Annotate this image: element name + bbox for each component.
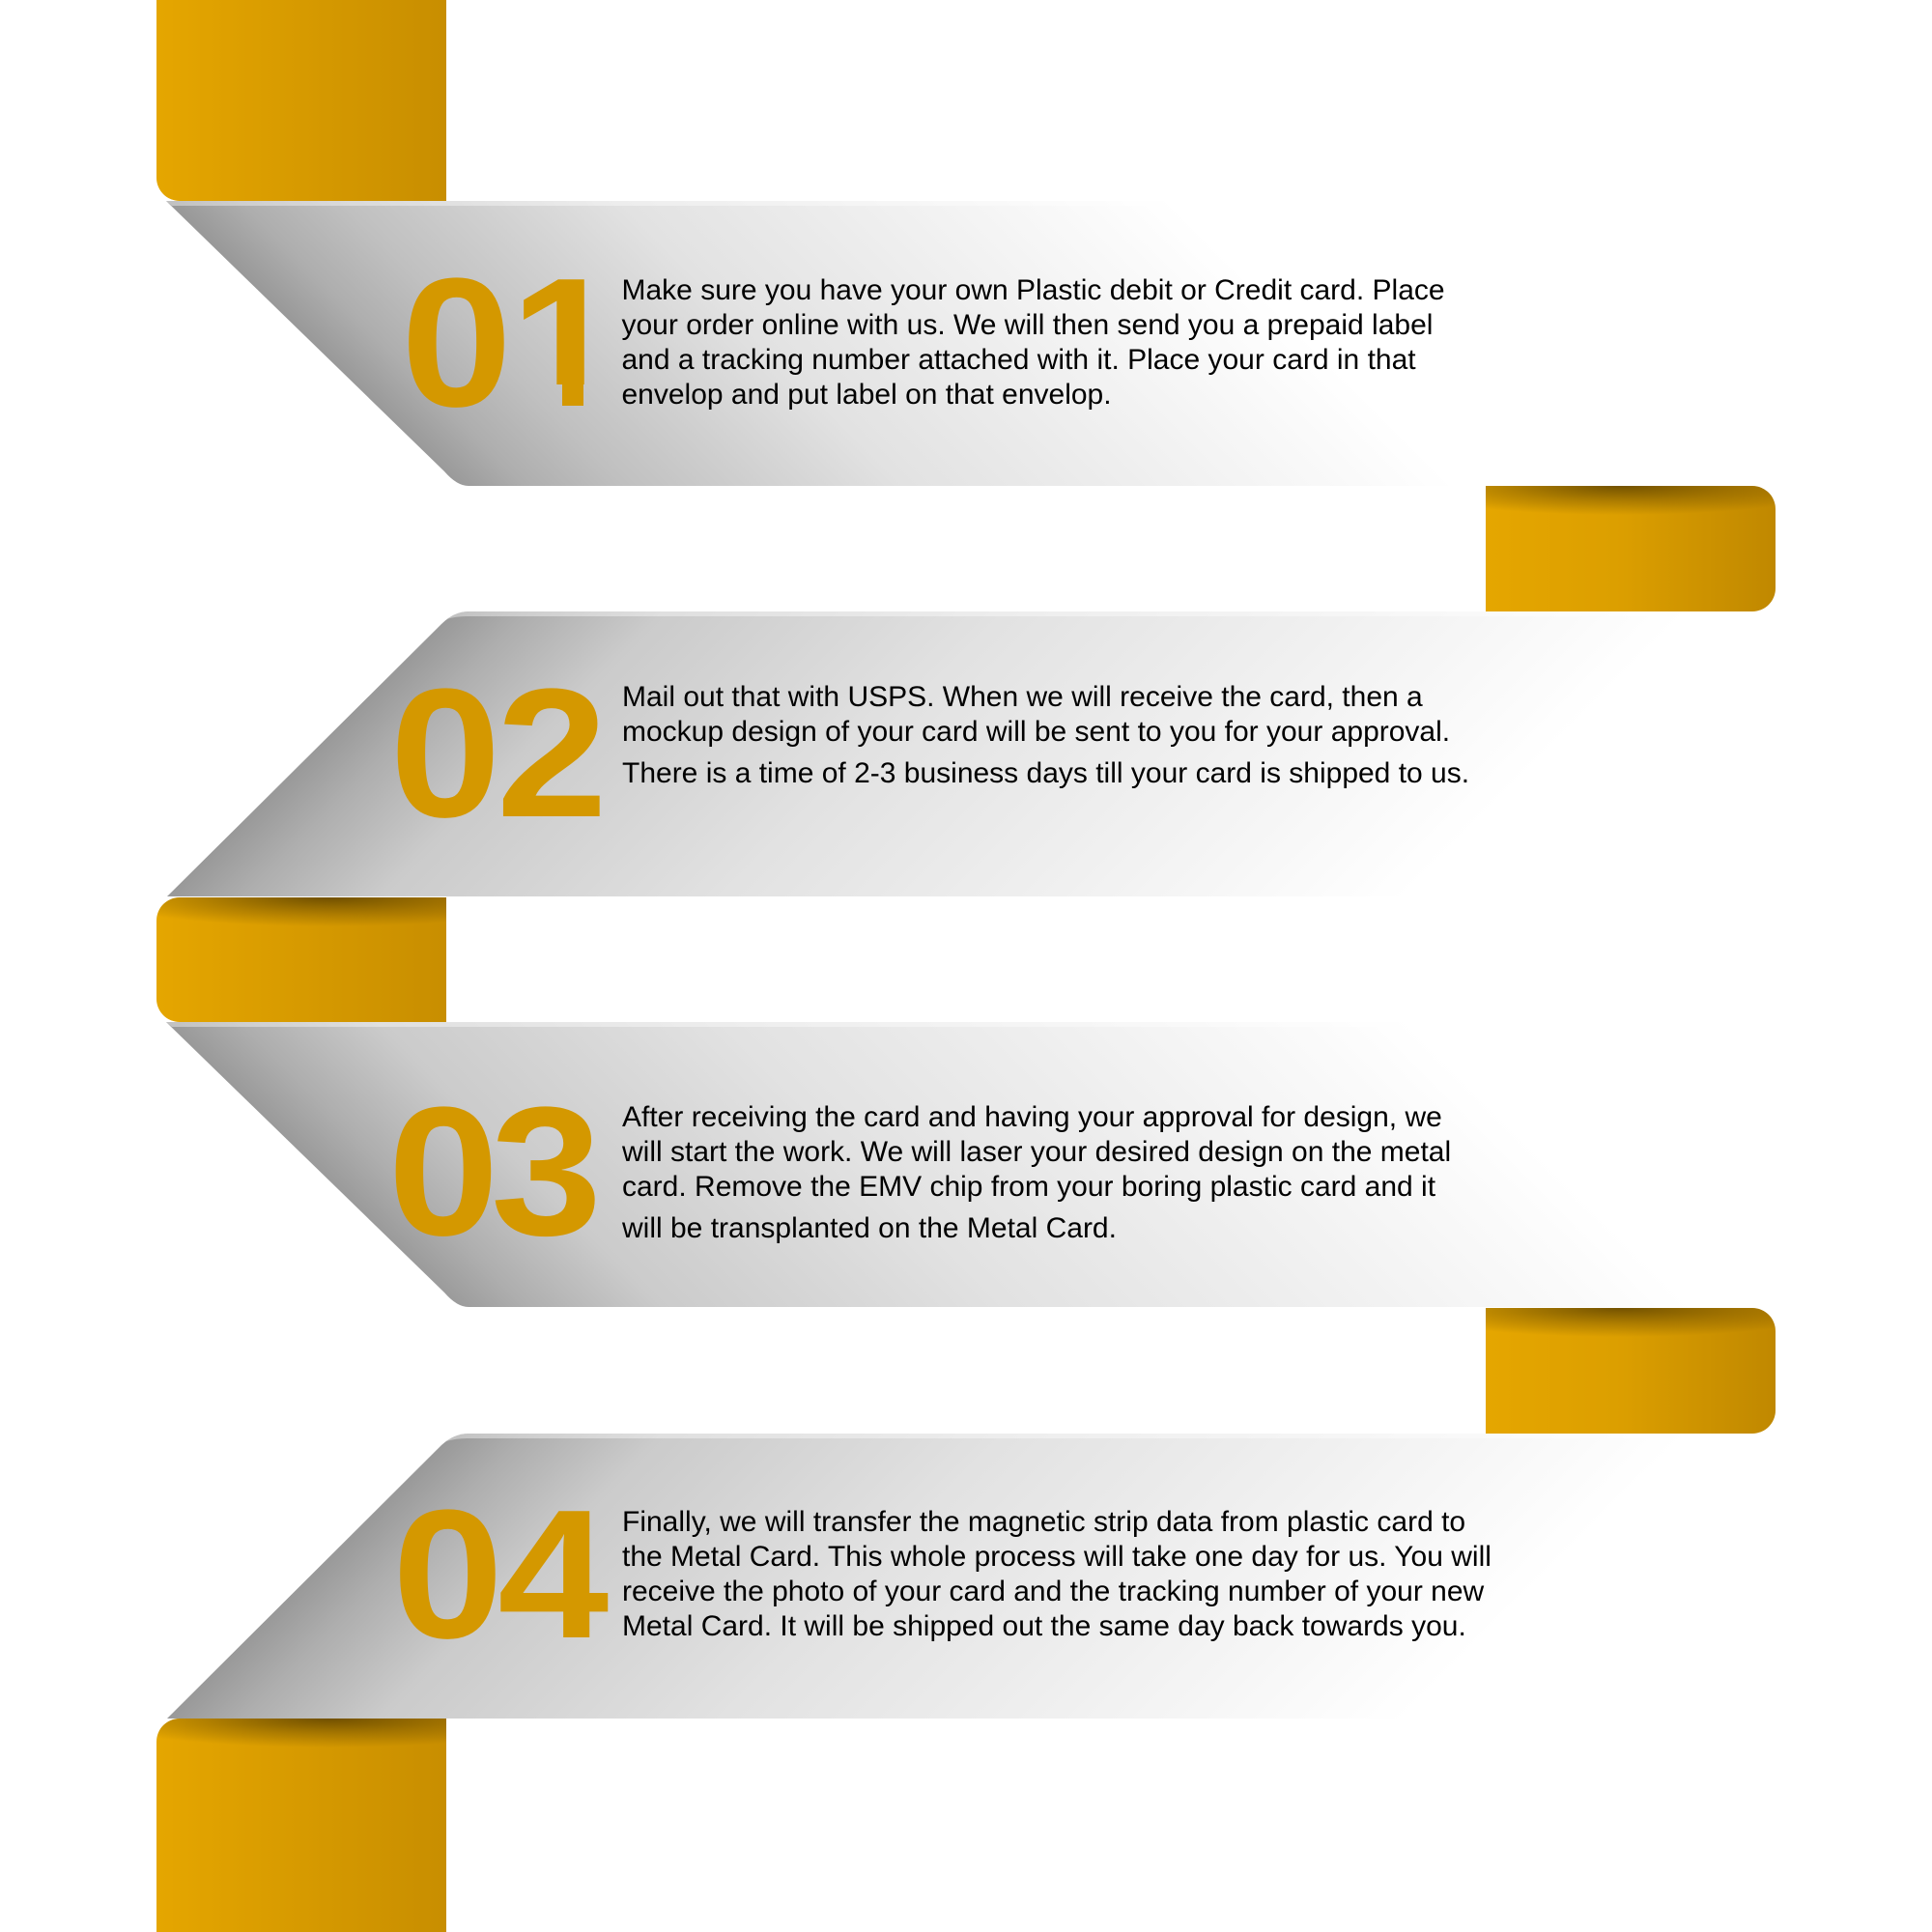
step 1 text: your order online with us. We will then send you a prepaid label <box>622 309 1433 341</box>
panel: step 3 <box>166 1022 1787 1307</box>
step 2 text: Mail out that with USPS. When we will receive the card, then a <box>622 681 1423 713</box>
step 4 text: Metal Card. It will be shipped out the same day back towards you. <box>622 1610 1466 1642</box>
step 1 text: Make sure you have your own Plastic debit or Credit card. Place <box>622 274 1445 306</box>
step 3 text: will be transplanted on the Metal Card. <box>621 1212 1117 1244</box>
step 1 text: envelop and put label on that envelop. <box>622 379 1112 411</box>
step 2 text <box>622 681 1469 789</box>
step 1 text: and a tracking number attached with it. Place your card in that <box>622 344 1416 376</box>
ribbon: bottom gold tab <box>156 1719 446 1932</box>
step 3 text: card. Remove the EMV chip from your boring plastic card and it <box>622 1171 1436 1203</box>
step 3 text <box>621 1101 1451 1244</box>
highlight strip 1 <box>166 201 1787 206</box>
number 04: 04 <box>392 1472 609 1677</box>
step 4 text: receive the photo of your card and the tracking number of your new <box>622 1576 1485 1607</box>
number 01: 01 <box>401 241 621 445</box>
step 2 text: mockup design of your card will be sent to you for your approval. <box>622 716 1450 748</box>
panel: step 2 <box>167 611 1787 896</box>
ribbon: gold tab left 2 <box>156 897 446 1022</box>
number 02: 02 <box>390 651 608 856</box>
highlight strip 3 <box>166 1022 1787 1027</box>
panel background 2 <box>167 611 1787 896</box>
step 4 text <box>622 1506 1492 1642</box>
step 3 text: will start the work. We will laser your desired design on the metal <box>621 1136 1451 1168</box>
panel background 1 <box>166 201 1787 486</box>
highlight strip 2 <box>441 611 1787 624</box>
step 2 text: There is a time of 2-3 business days till your card is shipped to us. <box>622 757 1469 789</box>
ribbon: gold tab right 1 <box>1486 486 1776 611</box>
highlight strip 4 <box>441 1434 1787 1445</box>
panel: step 4 <box>167 1434 1787 1719</box>
panel background 3 <box>166 1022 1787 1307</box>
step 1 text <box>622 274 1445 411</box>
step 3 text: After receiving the card and having your approval for design, we <box>622 1101 1442 1133</box>
ribbon: top gold tab <box>156 0 446 201</box>
ribbon: gold tab right 2 <box>1486 1308 1776 1434</box>
panel background 4 <box>167 1434 1787 1719</box>
step 4 text: Finally, we will transfer the magnetic strip data from plastic card to <box>622 1506 1465 1538</box>
step 4 text: the Metal Card. This whole process will take one day for us. You will <box>622 1541 1492 1573</box>
panel: step 1 <box>166 201 1443 486</box>
number 03: 03 <box>388 1069 602 1274</box>
